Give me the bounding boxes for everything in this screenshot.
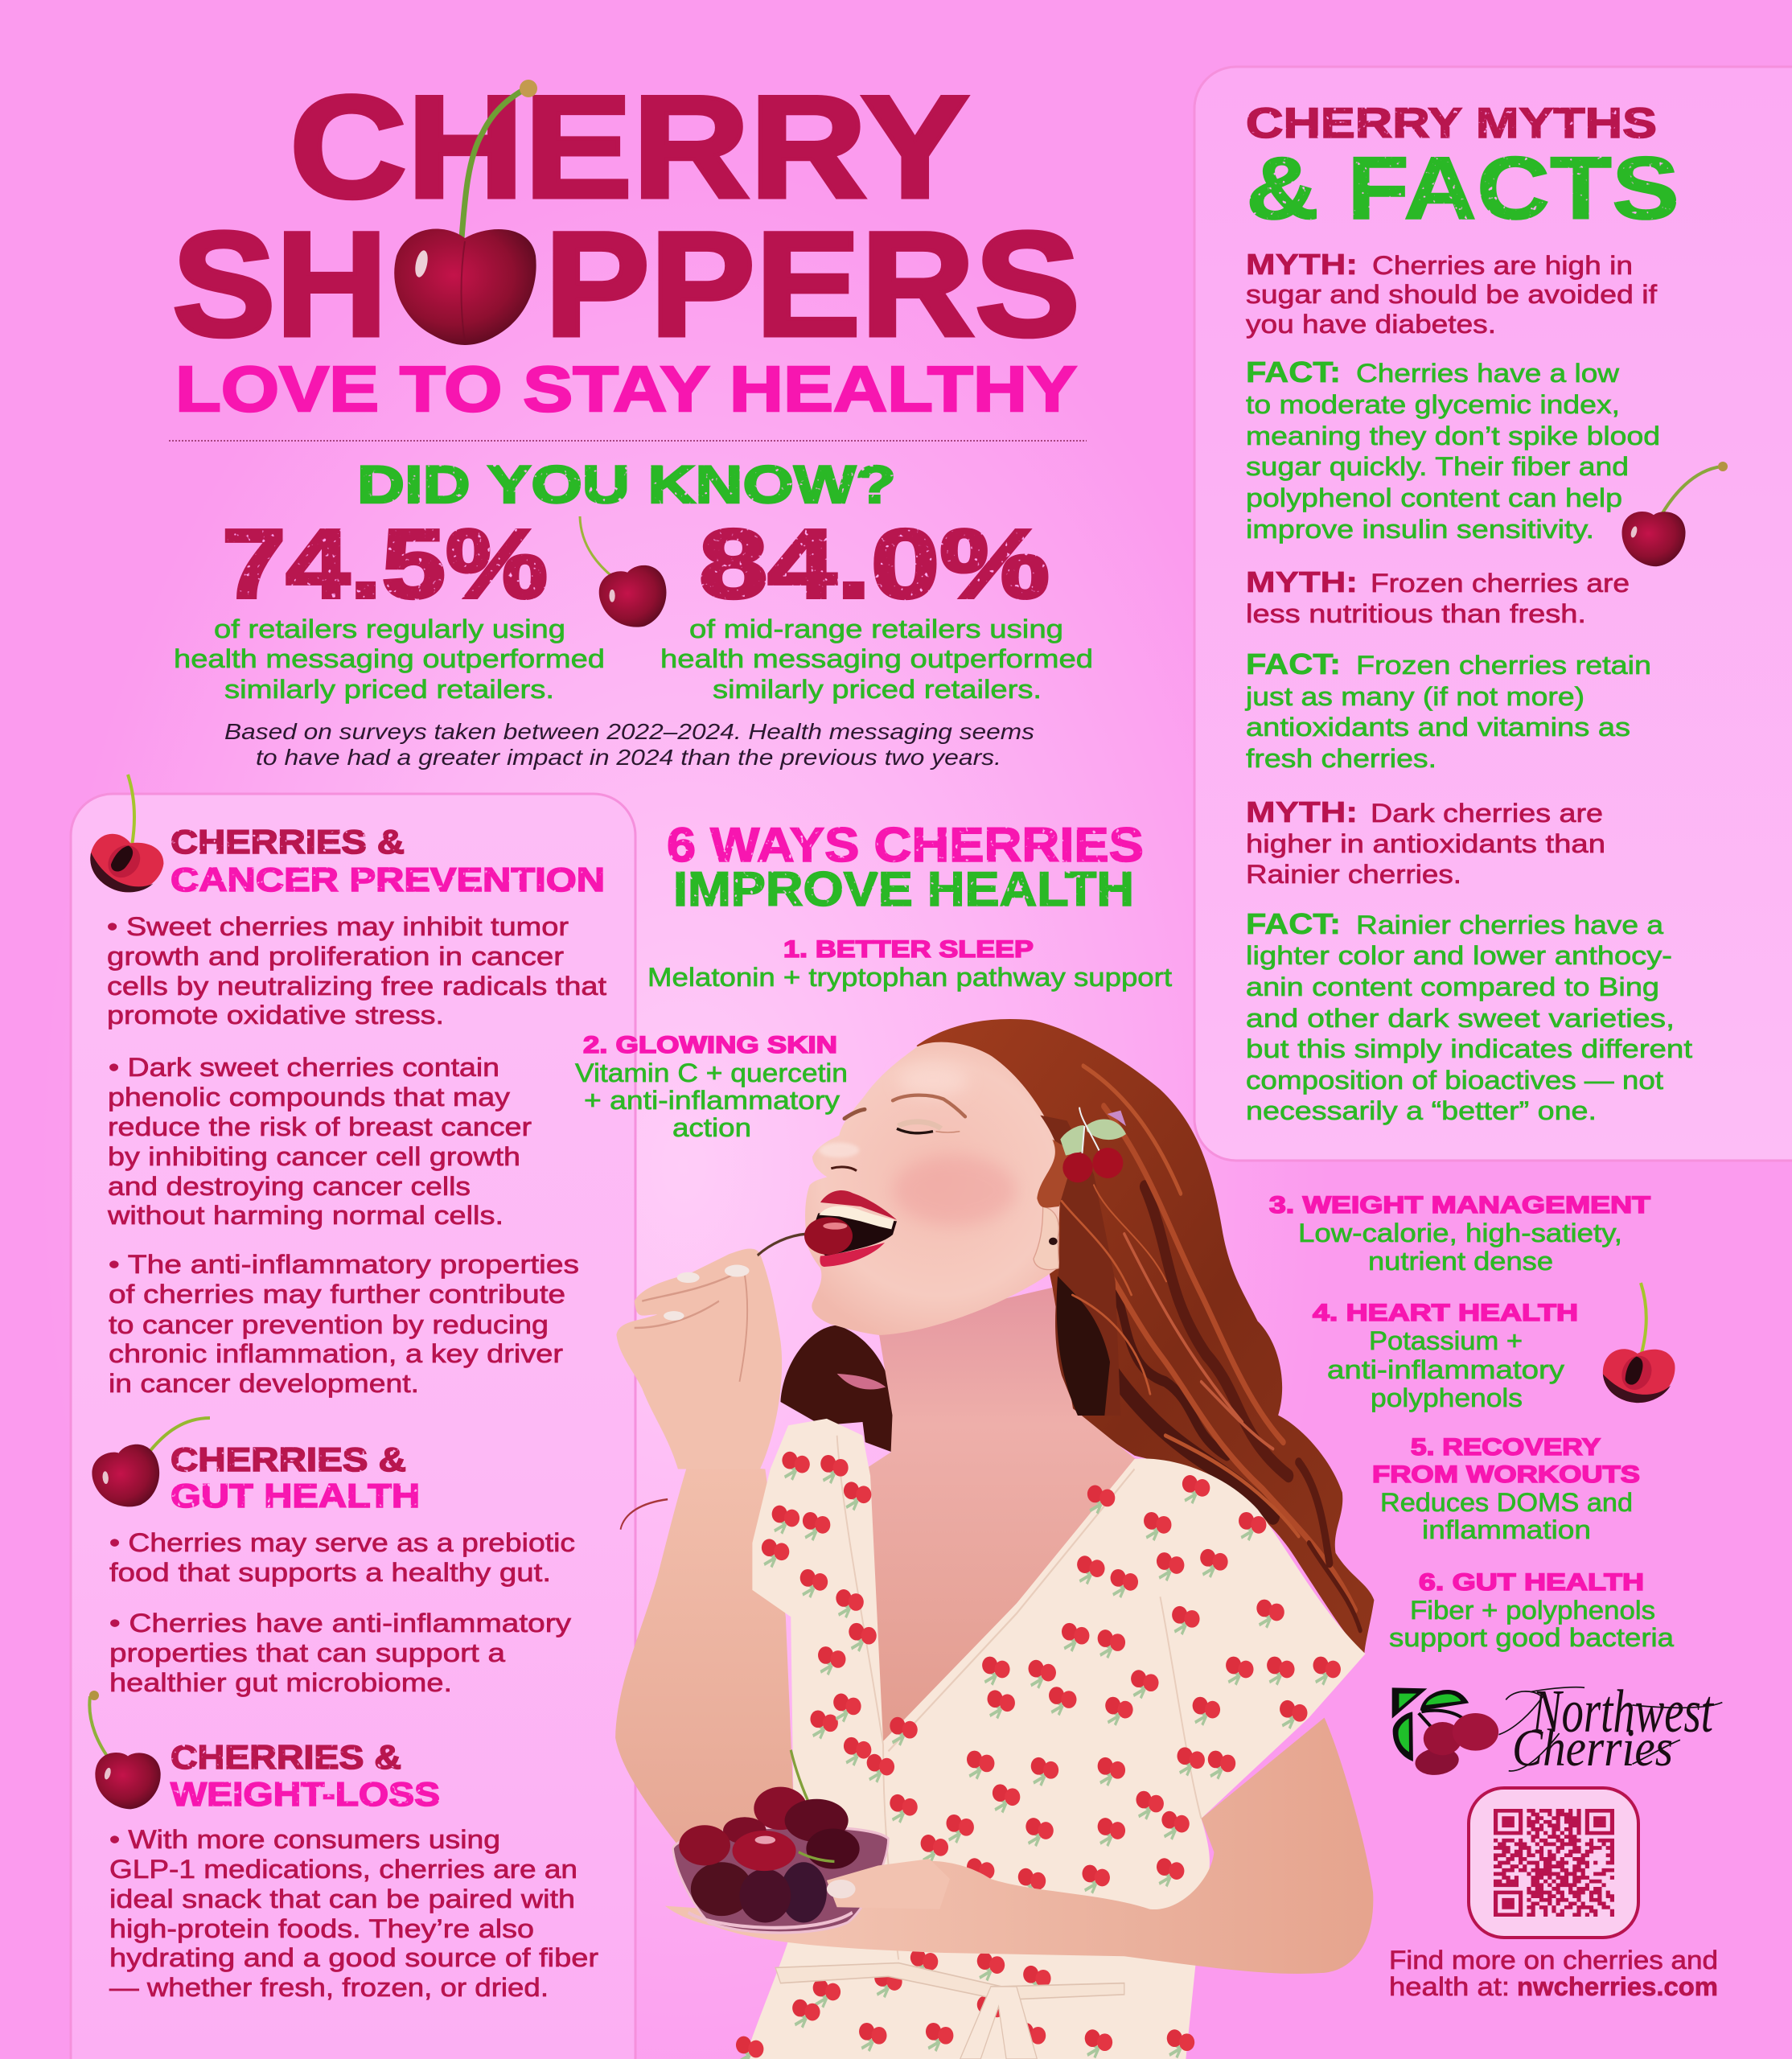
text: gut microbiome — [109, 1609, 571, 1697]
eyebrows — [845, 1095, 965, 1119]
fact 1: polyphenol content can help — [1246, 483, 1622, 512]
heading: and facts: & FACTS — [1246, 139, 1679, 238]
heading: weight loss — [171, 1738, 440, 1813]
myth 1: sugar and should be avoided if — [1246, 280, 1657, 309]
way 3: weight management: Low-calorie, high-satiety, — [1298, 1219, 1622, 1247]
way 3: weight management: 3. WEIGHT MANAGEMENT — [1269, 1192, 1650, 1219]
fact 2: just as many (if not more) — [1245, 682, 1584, 711]
text: anti-inflammatory: to cancer prevention by reducing — [109, 1310, 549, 1339]
fact 3: composition of bioactives — not — [1246, 1066, 1663, 1095]
long hair — [916, 1019, 1374, 1654]
text: gut microbiome: properties that can support a — [109, 1638, 505, 1667]
section: six ways heading: 6 WAYS CHERRIES — [667, 818, 1144, 872]
way 2: glowing skin: + anti-inflammatory — [584, 1086, 840, 1115]
survey note: Based on surveys taken between 2022–2024. Health messaging seems — [224, 719, 1034, 744]
panel background — [71, 794, 635, 2059]
way 5: recovery — [1372, 1434, 1640, 1544]
qr code — [1494, 1809, 1614, 1917]
myth 1: MYTH: — [1246, 248, 1358, 281]
section: six ways heading — [667, 818, 1144, 916]
fact 3 — [1246, 907, 1692, 1125]
text: gut microbiome: • Cherries have anti-inflammatory — [109, 1609, 571, 1638]
dark hair behind neck — [780, 1325, 894, 1453]
hair clip: cherries and leaves — [1060, 1108, 1126, 1182]
way 2: glowing skin: Vitamin C + quercetin — [575, 1058, 848, 1087]
website call to action: health at: — [1389, 1972, 1510, 2001]
icon: cherry between stats — [580, 516, 675, 635]
panel: cherries and health — [71, 775, 635, 2059]
stat caption left: of retailers regularly using — [214, 614, 565, 643]
way 4: heart health: Potassium + — [1369, 1326, 1523, 1355]
subtitle: LOVE TO STAY HEALTHY — [175, 353, 1077, 425]
hair wisps at temple — [1037, 1140, 1075, 1208]
survey note — [224, 719, 1034, 770]
text: glp-1: ideal snack that can be paired with — [109, 1884, 575, 1913]
way 4: heart health: polyphenols — [1371, 1383, 1523, 1412]
stat caption left: health messaging outperformed — [174, 644, 605, 673]
heading: gut health — [171, 1440, 420, 1514]
fact 3: necessarily a “better” one. — [1246, 1096, 1597, 1125]
stray hair — [620, 1499, 668, 1530]
heading: cancer prevention: CANCER PREVENTION — [171, 861, 605, 898]
ear — [1034, 1206, 1059, 1270]
cheek blush — [893, 1156, 1016, 1225]
fact 3: lighter color and lower anthocy- — [1246, 941, 1672, 970]
blouse cherry print — [736, 1452, 1341, 2059]
heading: cherry myths: CHERRY MYTHS — [1246, 100, 1657, 147]
way 5: recovery: Reduces DOMS and — [1380, 1488, 1633, 1517]
fact 3: anin content compared to Bing — [1246, 972, 1659, 1001]
text: glp-1: hydrating and a good source of fiber — [109, 1943, 598, 1972]
fact 1: sugar quickly. Their fiber and — [1246, 452, 1629, 481]
text: glp-1 — [109, 1825, 598, 2002]
text: dark sweet cherries — [107, 1053, 532, 1230]
text: anti-inflammatory: in cancer development. — [109, 1369, 419, 1398]
title: cherry: CHERRY — [290, 66, 969, 228]
smile: lips, teeth, cherry — [804, 1190, 897, 1267]
way 3: weight management — [1269, 1192, 1650, 1276]
survey note: to have had a greater impact in 2024 than the previous two years. — [256, 745, 1001, 770]
way 4: heart health — [1313, 1300, 1578, 1412]
myth 1: Cherries are high in — [1372, 251, 1633, 280]
stat caption left — [174, 614, 605, 704]
myth 2: Frozen cherries are — [1371, 569, 1630, 598]
hair strands — [1062, 1066, 1360, 1630]
heading: gut health: GUT HEALTH — [171, 1477, 420, 1514]
text: sweet cherries: cells by neutralizing free radicals that — [107, 972, 606, 1001]
fact 2: antioxidants and vitamins as — [1246, 713, 1630, 742]
dark hair shade under ear — [1057, 1276, 1110, 1416]
heading: gut health: CHERRIES & — [171, 1440, 406, 1478]
stat caption right: of mid-range retailers using — [689, 614, 1063, 643]
forehead highlight — [898, 1064, 968, 1096]
way 3: weight management: nutrient dense — [1368, 1247, 1553, 1276]
title: shoppers — [172, 202, 1080, 368]
icon: halved cherry — [84, 775, 167, 899]
section: six ways heading: IMPROVE HEALTH — [673, 862, 1134, 916]
bowl arm and hand — [665, 1718, 1373, 1974]
stat caption right: similarly priced retailers. — [713, 675, 1042, 704]
stat caption left: similarly priced retailers. — [224, 675, 554, 704]
website call to action: Find more on cherries and — [1389, 1946, 1718, 1975]
myth 1 — [1246, 248, 1657, 339]
blouse fold lines — [837, 1436, 1201, 1959]
fact 2: FACT: — [1246, 647, 1341, 680]
myth 2: less nutritious than fresh. — [1246, 599, 1586, 628]
myth 3: MYTH: — [1246, 795, 1358, 828]
heading: cancer prevention — [171, 823, 605, 898]
hair around ear — [1040, 1116, 1120, 1416]
myth 2 — [1246, 565, 1630, 628]
myth 1: you have diabetes. — [1246, 310, 1496, 339]
fact 1: FACT: — [1246, 355, 1341, 388]
fact 3: Rainier cherries have a — [1356, 910, 1663, 939]
thumbnail — [827, 1880, 856, 1898]
title: shoppers: PPERS — [545, 202, 1080, 368]
fact 3: FACT: — [1246, 907, 1341, 940]
eyelid and eyelashes — [897, 1122, 960, 1133]
stat: 74.5%: 74.5% — [222, 509, 548, 619]
logo wordmark — [1512, 1678, 1714, 1777]
text: anti-inflammatory: chronic inflammation, a key driver — [109, 1339, 563, 1368]
qr code card — [1469, 1788, 1638, 1938]
text: dark sweet cherries: phenolic compounds that may — [108, 1083, 510, 1112]
text: sweet cherries: promote oxidative stress. — [107, 1001, 444, 1030]
way 1: better sleep: Melatonin + tryptophan pathway support — [647, 963, 1172, 992]
way 6: gut health — [1389, 1569, 1674, 1652]
raised hand — [616, 1249, 782, 1469]
nose details — [819, 1143, 859, 1171]
fact 2 — [1245, 647, 1651, 773]
thumb — [827, 1859, 950, 1909]
blouse tie — [775, 1963, 1124, 2059]
blouse — [745, 1419, 1366, 2059]
website call to action — [1389, 1946, 1718, 2001]
cherry stem in fingers — [758, 1234, 808, 1256]
myth 3: Dark cherries are — [1371, 799, 1603, 828]
panel: myths and facts — [1194, 67, 1792, 1161]
text: anti-inflammatory: • The anti-inflammatory properties — [109, 1250, 579, 1279]
text: dark sweet cherries: • Dark sweet cherries contain — [109, 1053, 499, 1082]
heading: cancer prevention: CHERRIES & — [171, 823, 405, 861]
title: shoppers: SH — [172, 202, 388, 368]
way 6: gut health: Fiber + polyphenols — [1410, 1596, 1655, 1625]
way 2: glowing skin: action — [672, 1113, 751, 1142]
way 1: better sleep: 1. BETTER SLEEP — [783, 936, 1034, 963]
way 4: heart health: anti-inflammatory — [1327, 1355, 1564, 1384]
fact 1: to moderate glycemic index, — [1246, 390, 1620, 419]
illustration: woman eating a cherry — [615, 1019, 1374, 2059]
way 5: recovery: 5. RECOVERY — [1411, 1434, 1601, 1461]
hair highlight — [837, 1374, 886, 1389]
myth 2: MYTH: — [1246, 565, 1358, 598]
logo wordmark: Northwest — [1531, 1678, 1714, 1745]
title block — [172, 66, 1080, 425]
bowl of cherries — [673, 1750, 888, 1933]
logo mark — [1392, 1687, 1722, 1777]
heading: weight loss: WEIGHT-LOSS — [171, 1775, 440, 1813]
neck and chest — [865, 1288, 1140, 1745]
icon: cherry weight loss — [89, 1691, 161, 1809]
woman head in traced coordinates — [804, 1042, 1166, 1416]
woman body in traced coordinates — [615, 1019, 1374, 2059]
way 2: glowing skin — [575, 1032, 848, 1142]
fact 2: fresh cherries. — [1246, 744, 1436, 773]
text: glp-1: • With more consumers using — [109, 1825, 500, 1854]
text: glp-1: GLP-1 medications, cherries are an — [109, 1855, 577, 1884]
fact 1 — [1246, 355, 1660, 544]
heading: weight loss: CHERRIES & — [171, 1738, 401, 1776]
icon: cherry in myths panel — [1622, 462, 1728, 566]
heading: did you know: DID YOU KNOW? — [357, 454, 896, 514]
stat caption right: health messaging outperformed — [660, 644, 1093, 673]
did you know section — [174, 454, 1093, 770]
fact 1: meaning they don’t spike blood — [1246, 421, 1660, 450]
text: dark sweet cherries: and destroying cancer cells — [108, 1172, 471, 1201]
text: dark sweet cherries: reduce the risk of breast cancer — [108, 1112, 532, 1141]
logo flourishes — [1498, 1687, 1722, 1771]
myth 3: higher in antioxidants than — [1246, 829, 1605, 858]
fact 3: and other dark sweet varieties, — [1246, 1004, 1675, 1033]
text: sweet cherries: • Sweet cherries may inhibit tumor — [107, 912, 569, 941]
text: sweet cherries: growth and proliferation in cancer — [107, 942, 564, 971]
way 4: heart health: 4. HEART HEALTH — [1313, 1300, 1578, 1326]
way 5: recovery: FROM WORKOUTS — [1372, 1461, 1640, 1488]
text: prebiotic: food that supports a healthy gut. — [109, 1558, 551, 1587]
text: anti-inflammatory — [109, 1250, 579, 1398]
text: dark sweet cherries: by inhibiting cancer cell growth — [108, 1142, 520, 1171]
text: dark sweet cherries: without harming normal cells. — [107, 1201, 503, 1230]
way 6: gut health: support good bacteria — [1389, 1623, 1674, 1652]
temple strands — [1062, 1185, 1166, 1394]
fact 1: Cherries have a low — [1356, 359, 1620, 388]
fact 1: improve insulin sensitivity. — [1246, 515, 1594, 544]
fact 2: Frozen cherries retain — [1356, 651, 1651, 680]
raised arm — [615, 1462, 793, 1852]
logo wordmark: Cherries — [1512, 1719, 1673, 1777]
text: prebiotic: • Cherries may serve as a prebiotic — [109, 1528, 575, 1557]
myth 3 — [1246, 795, 1605, 889]
logo: northwest cherries — [1392, 1678, 1722, 1777]
text: glp-1: high-protein foods. They’re also — [109, 1914, 534, 1943]
text: gut microbiome: healthier gut microbiome. — [109, 1668, 452, 1697]
website call to action: nwcherries.com — [1517, 1972, 1718, 2001]
icon: title cherry with stem — [394, 80, 537, 345]
icon: halved cherry near heart health — [1601, 1283, 1678, 1406]
stat caption right — [660, 614, 1093, 704]
way 6: gut health: 6. GUT HEALTH — [1419, 1569, 1644, 1596]
icon: cherry gut health — [86, 1418, 210, 1518]
way 2: glowing skin: 2. GLOWING SKIN — [583, 1032, 837, 1058]
text: sweet cherries — [107, 912, 606, 1030]
stat: 84.0%: 84.0% — [699, 509, 1050, 619]
way 5: recovery: inflammation — [1422, 1515, 1591, 1544]
text: prebiotic — [109, 1528, 575, 1587]
way 1: better sleep — [647, 936, 1172, 992]
myth 3: Rainier cherries. — [1246, 860, 1461, 889]
face — [805, 1042, 1061, 1335]
panel background — [1194, 67, 1792, 1161]
text: glp-1: — whether fresh, frozen, or dried. — [109, 1973, 549, 2002]
fact 3: but this simply indicates different — [1246, 1034, 1692, 1063]
text: anti-inflammatory: of cherries may further contribute — [109, 1280, 565, 1309]
hand creases and nails — [635, 1265, 750, 1382]
